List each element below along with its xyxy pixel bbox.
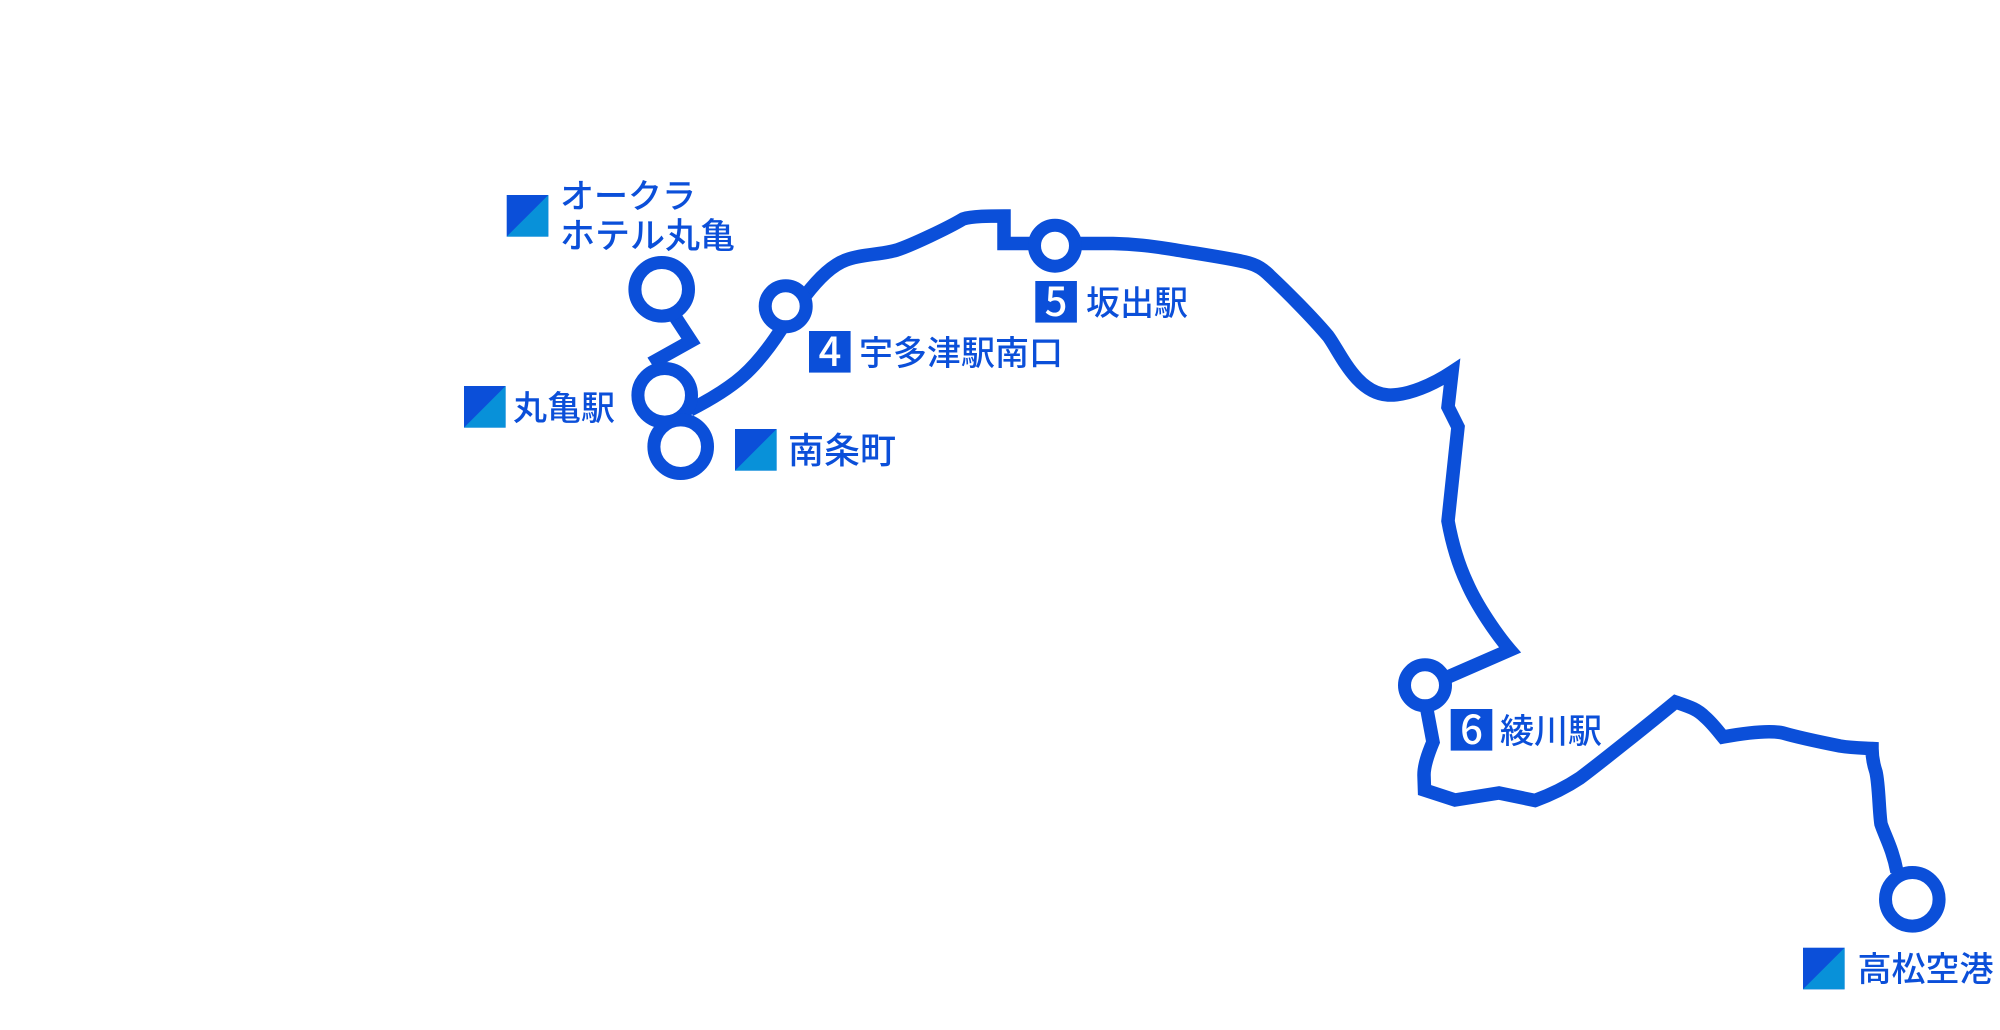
icon: split square: [464, 386, 506, 428]
number badge 6: [1451, 698, 1492, 756]
text: Okura Hotel Marugame: ホテル丸亀: [560, 217, 735, 256]
label: Takamatsu Airport: [1803, 948, 1994, 989]
text: Takamatsu Airport: 高松空港: [1858, 951, 1994, 989]
label: Okura Hotel Marugame: [507, 178, 735, 256]
station: Okura Hotel Marugame: [635, 262, 688, 316]
text: Utazu Station South: 宇多津駅南口: [859, 335, 1063, 373]
station: Marugame Station: [638, 368, 692, 422]
station: Nanjo-machi: [654, 420, 708, 474]
route line: Marugame to Takamatsu Airport: [690, 216, 1897, 872]
number badge 4: [809, 320, 851, 378]
number badge 5: 5: [1045, 270, 1067, 328]
text: Ayagawa Station: 綾川駅: [1500, 713, 1602, 751]
number badge 6: 6: [1460, 698, 1483, 756]
text: Okura Hotel Marugame: オークラ: [560, 178, 696, 216]
station 5: Sakaide Station: [1034, 225, 1076, 266]
station: Takamatsu Airport: [1886, 872, 1939, 926]
text: Sakaide Station: 坂出駅: [1086, 285, 1188, 323]
number badge 5: [1035, 270, 1077, 328]
icon: split square: [507, 195, 548, 237]
label: Ayagawa Station: [1451, 698, 1602, 756]
label: Nanjo-machi: [735, 429, 896, 471]
icon: split square: [1803, 948, 1845, 989]
text: Nanjo-machi: 南条町: [788, 430, 896, 471]
station 6: Ayagawa Station: [1404, 665, 1446, 706]
station 4: Utazu Station South: [765, 286, 806, 327]
route line: Okura Hotel to Marugame: [657, 312, 691, 374]
number badge 4: 4: [819, 320, 841, 378]
label: Sakaide Station: [1035, 270, 1188, 328]
label: Utazu Station South: [809, 320, 1063, 378]
text: Marugame Station: 丸亀駅: [513, 390, 615, 428]
label: Marugame Station: [464, 386, 615, 428]
icon: split square: [735, 429, 777, 471]
